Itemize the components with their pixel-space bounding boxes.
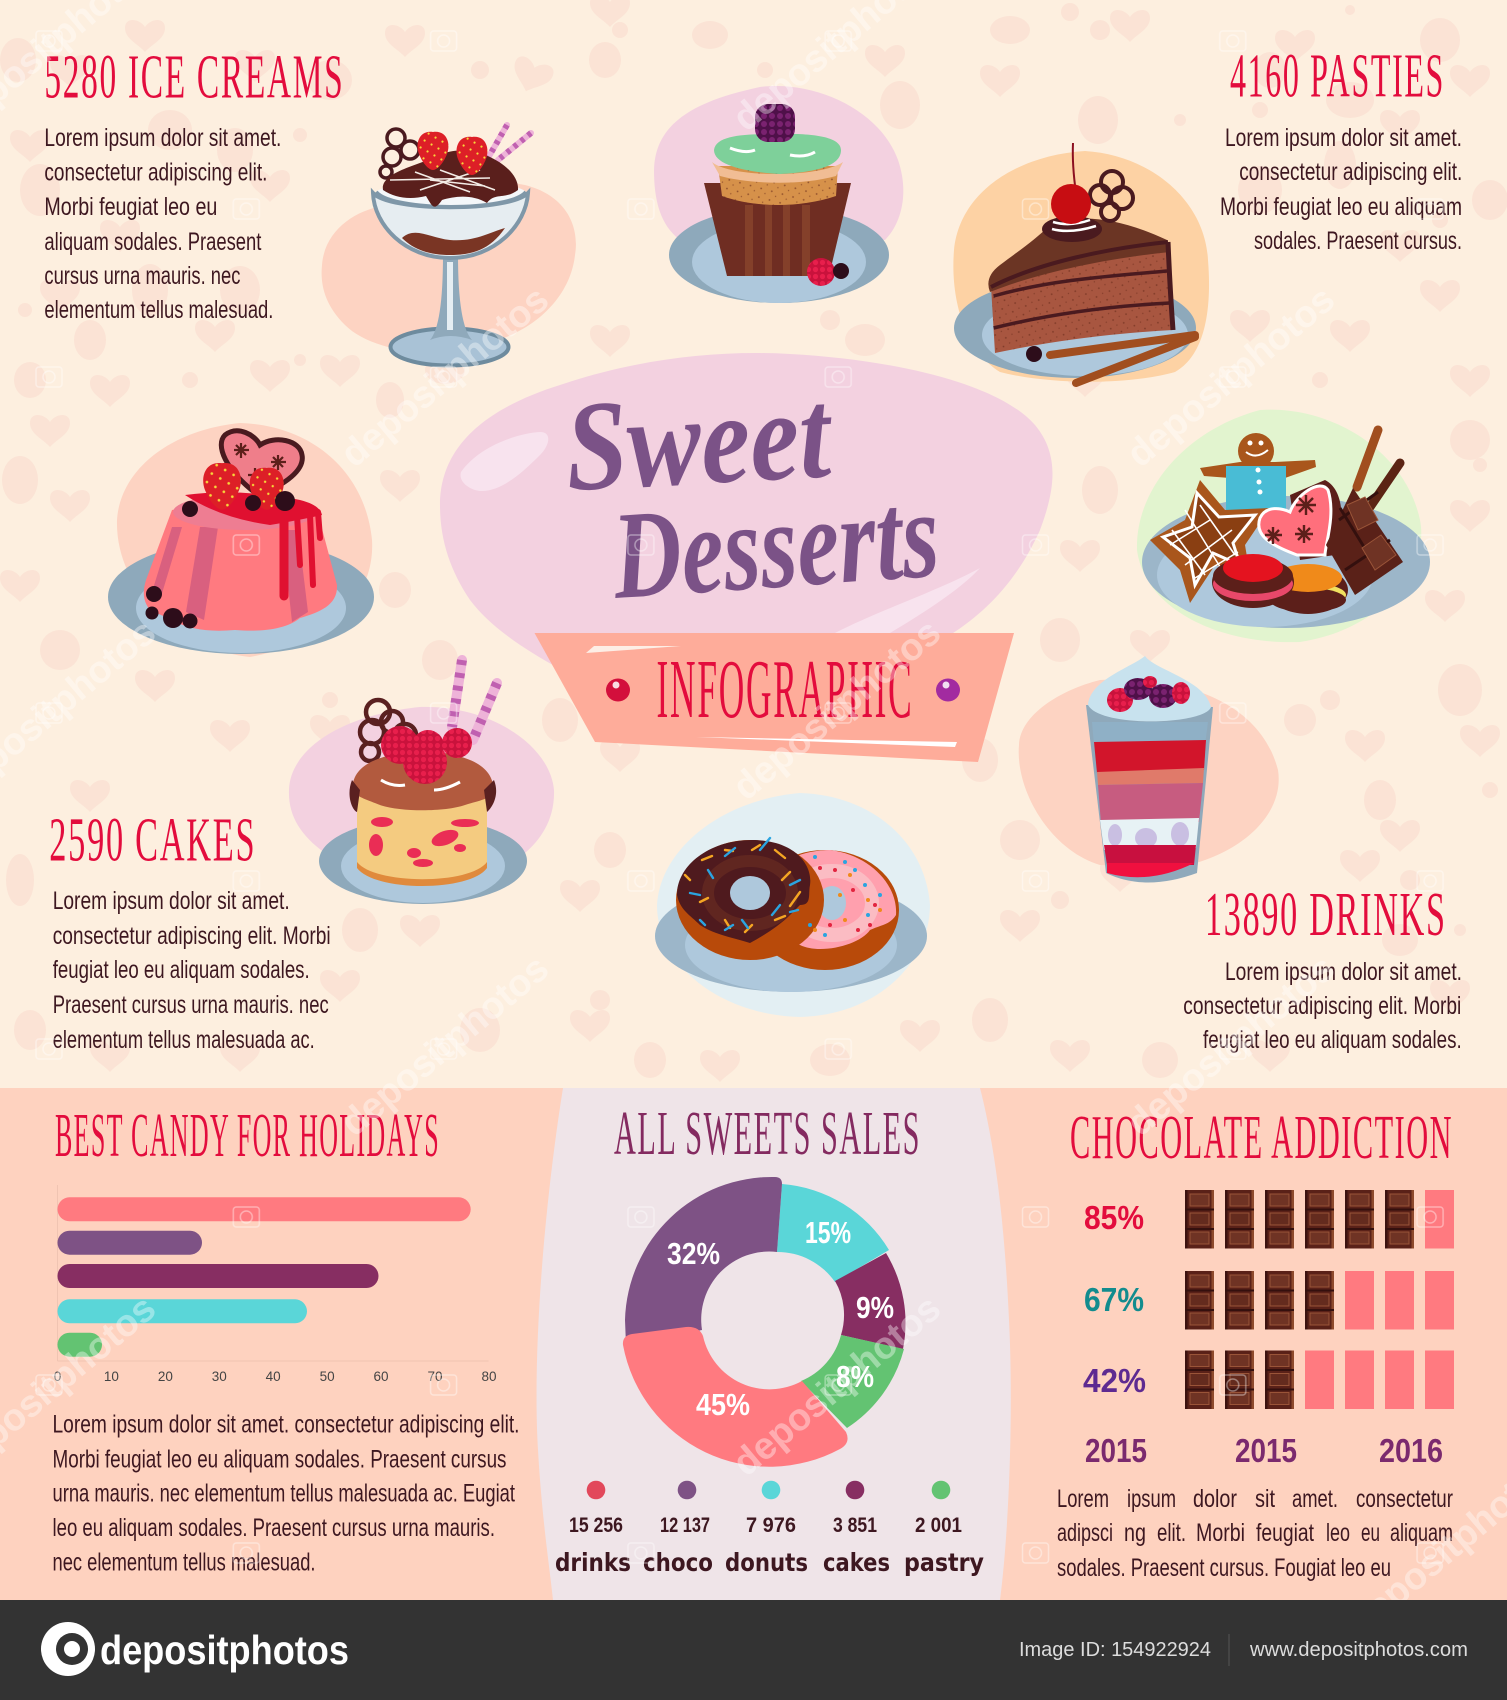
chocolate body text: dolor: [1193, 1485, 1237, 1513]
candy body text: leo eu aliquam sodales. Praesent cursus urna mauris.: [52, 1514, 495, 1542]
watermarks: depositphotos: [333, 278, 557, 476]
percentages: 85%: [1084, 1199, 1144, 1236]
candy body text: nec elementum tellus malesuad.: [52, 1549, 316, 1577]
donut chart: 45%: [696, 1387, 750, 1422]
year labels: 2015: [1235, 1432, 1297, 1469]
legend: pastry: [904, 1548, 984, 1577]
footer logo text: depositphotos: [100, 1627, 349, 1673]
watermarks: depositphotos: [1119, 278, 1343, 476]
donut chart: 8%: [836, 1359, 874, 1394]
watermarks: depositphotos: [333, 947, 557, 1145]
cakes body text: consectetur adipiscing elit. Morbi: [53, 922, 331, 950]
watermarks: depositphotos: [725, 611, 949, 809]
legend: 3 851: [833, 1514, 877, 1537]
horizontal bar chart: 0: [54, 1369, 61, 1384]
pasties body text: [1220, 124, 1462, 255]
stat: ice creams: 5280 ICE CREAMS: [44, 44, 344, 112]
year labels: [1085, 1432, 1443, 1469]
icon: chocolate cake slice: [953, 143, 1209, 383]
legend: 2 001: [915, 1514, 962, 1537]
footer logo icon: [41, 1622, 95, 1676]
ribbon banner: INFOGRAPHIC: [656, 643, 914, 736]
watermarks: depositphotos: [725, 1287, 949, 1485]
chocolate body text: [1057, 1485, 1453, 1582]
ice creams body text: Lorem ipsum dolor sit amet.: [44, 124, 281, 152]
legend: drinks: [555, 1548, 631, 1577]
ice creams body text: aliquam sodales. Praesent: [44, 228, 261, 256]
title text: Desserts: [608, 466, 943, 626]
bubble highlight right: [835, 568, 980, 633]
stat: ice creams: [44, 44, 344, 324]
horizontal bar chart: 70: [427, 1369, 443, 1384]
percentages: 67%: [1084, 1281, 1144, 1318]
icon: pink pudding: [108, 423, 374, 657]
chocolate body text: elit.: [1157, 1519, 1186, 1547]
chocolate body text: adipsci: [1057, 1519, 1113, 1547]
cakes body text: Lorem ipsum dolor sit amet.: [53, 887, 290, 915]
horizontal bar chart: 10: [104, 1369, 119, 1384]
stat: drinks: [1183, 881, 1462, 1054]
chocolate body text: aliquam: [1390, 1519, 1453, 1547]
footer bar: [0, 1600, 1507, 1700]
title bubble: [440, 353, 1052, 700]
chocolate body text: ipsum: [1127, 1485, 1176, 1513]
icon: cupcake: [654, 86, 903, 303]
year labels: 2015: [1085, 1432, 1147, 1469]
donut chart: 32%: [667, 1236, 720, 1271]
bottom panel: sweets sales background: [537, 1088, 1011, 1600]
drinks body text: [1183, 958, 1462, 1054]
candy body text: [52, 1411, 520, 1577]
chocolate body text: Lorem: [1057, 1485, 1109, 1513]
horizontal bar chart: [54, 1185, 497, 1384]
horizontal bar chart: 40: [266, 1369, 281, 1384]
panel: best candy for holidays: [52, 1102, 520, 1577]
legend: 7 976: [746, 1514, 796, 1537]
horizontal bar chart: 60: [373, 1369, 389, 1384]
legend: [555, 1481, 984, 1577]
cakes body text: feugiat leo eu aliquam sodales.: [53, 956, 310, 984]
icon: raspberry cheesecake: [289, 660, 554, 904]
bottom panel: candy and chocolate background: [0, 1088, 1507, 1600]
website url: www.depositphotos.com: [1249, 1639, 1468, 1661]
ice creams body text: Morbi feugiat leo eu: [44, 193, 217, 221]
icon: berry parfait glass: [1019, 656, 1279, 882]
horizontal bar chart: 50: [320, 1369, 335, 1384]
candy body text: urna mauris. nec elementum tellus malesuada ac. Eugiat: [52, 1480, 515, 1508]
panel: best candy for holidays: BEST CANDY FOR HOLIDAYS: [55, 1102, 440, 1170]
chocolate body text: sodales. Praesent cursus. Fougiat leo eu: [1057, 1554, 1391, 1582]
chocolate body text: feugiat: [1256, 1519, 1314, 1547]
panel: all sweets sales: ALL SWEETS SALES: [614, 1100, 921, 1168]
panel: all sweets sales: [555, 1100, 984, 1577]
title text: [562, 362, 943, 626]
background pattern of pale hearts and dots: [0, 0, 1507, 1082]
ice creams body text: [44, 124, 281, 324]
cakes body text: Praesent cursus urna mauris. nec: [53, 991, 329, 1019]
legend: 15 256: [569, 1514, 623, 1537]
chocolate body text: ng: [1124, 1519, 1146, 1547]
chocolate pictogram chart: [1185, 1190, 1454, 1409]
icon: two donuts: [655, 793, 930, 1017]
stat: pasties: [1220, 43, 1462, 255]
donut chart: 9%: [856, 1290, 894, 1325]
ice creams body text: consectetur adipiscing elit.: [44, 159, 267, 187]
legend: donuts: [725, 1548, 808, 1577]
cakes body text: [53, 887, 331, 1054]
chocolate body text: sit: [1255, 1485, 1275, 1513]
year labels: 2016: [1379, 1432, 1443, 1469]
candy body text: Morbi feugiat leo eu aliquam sodales. Praesent cursus: [52, 1445, 506, 1473]
donut chart: [623, 1177, 906, 1467]
legend: choco: [643, 1548, 713, 1577]
candy body text: Lorem ipsum dolor sit amet. consectetur adipiscing elit.: [52, 1411, 520, 1439]
percentages: 42%: [1083, 1362, 1146, 1399]
chocolate body text: consectetur: [1356, 1485, 1453, 1513]
legend: 12 137: [660, 1514, 710, 1537]
icon: ice cream sundae: [322, 125, 576, 366]
ice creams body text: elementum tellus malesuad.: [44, 296, 273, 324]
stat: cakes: 2590 CAKES: [49, 807, 256, 875]
ice creams body text: cursus urna mauris. nec: [44, 262, 240, 290]
watermarks: depositphotos: [1119, 947, 1343, 1145]
horizontal bar chart: 20: [158, 1369, 173, 1384]
cakes body text: elementum tellus malesuada ac.: [53, 1026, 315, 1054]
banner dots: [606, 678, 960, 702]
panel: chocolate addiction: [1057, 1104, 1454, 1582]
percentages: [1083, 1199, 1146, 1399]
chocolate body text: amet.: [1292, 1485, 1338, 1513]
legend: cakes: [823, 1548, 890, 1577]
ribbon banner: [534, 633, 1014, 762]
horizontal bar chart: 30: [212, 1369, 227, 1384]
chocolate body text: Morbi: [1196, 1519, 1245, 1547]
icon: gingerbread cookies plate: [1137, 410, 1430, 642]
donut chart: 15%: [805, 1215, 851, 1250]
chocolate body text: eu: [1361, 1519, 1380, 1547]
chocolate body text: leo: [1326, 1519, 1350, 1547]
horizontal bar chart: 80: [481, 1369, 497, 1384]
bubble highlight left: [461, 432, 548, 491]
stat: cakes: [49, 807, 331, 1054]
title text: Sweet: [562, 362, 836, 518]
image id: Image ID: 154922924: [1019, 1639, 1211, 1661]
